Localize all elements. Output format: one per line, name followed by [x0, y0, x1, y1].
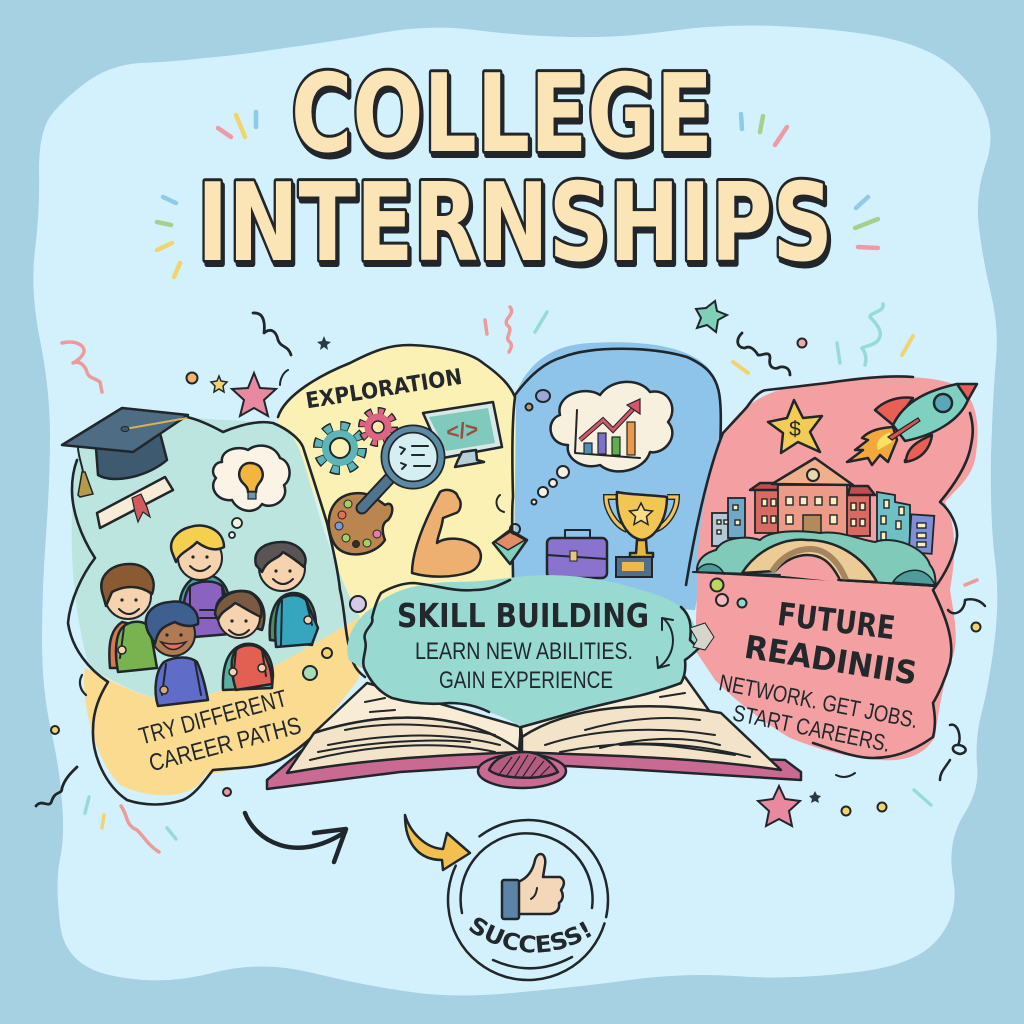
centre fold [519, 727, 521, 752]
page lines [310, 693, 750, 760]
squiggles [36, 304, 985, 852]
body [893, 384, 968, 441]
red panel background [695, 377, 978, 760]
small arc doodle [497, 495, 504, 512]
yellow panel background [278, 344, 516, 625]
icon: rocket [847, 384, 977, 465]
icon: teal gear [318, 426, 362, 470]
stars [232, 373, 276, 416]
icon: computer monitor [423, 402, 502, 467]
student: curly hair [146, 602, 208, 706]
ground line [693, 572, 934, 586]
upper pages left [314, 683, 521, 750]
icon: graduation cap [62, 408, 188, 497]
label: SUCCESS! [469, 918, 592, 953]
right towers [877, 492, 910, 547]
opening under bridge [775, 555, 840, 582]
panel fill: teal [72, 416, 360, 700]
icon: campus buildings [693, 458, 936, 586]
heading: SKILL BUILDING [397, 596, 649, 635]
left towers [712, 513, 732, 546]
lower pages right [522, 706, 781, 770]
student: grey hair [255, 542, 318, 647]
icon: pink gear [362, 411, 394, 443]
coloured bubbles [710, 578, 746, 608]
arch bridge [742, 540, 877, 582]
icon: trophy [606, 492, 677, 577]
icon: thumbs up [502, 854, 564, 919]
panel: try different career paths: CAREER PATHS [146, 712, 304, 777]
icon: palette [329, 493, 392, 554]
wings [755, 490, 779, 533]
title [197, 52, 833, 286]
panel: future readiness [686, 376, 978, 760]
icon: diploma [97, 477, 173, 528]
icon: small cube [493, 524, 527, 564]
blue panel background [510, 342, 722, 610]
student: brown hair left [101, 564, 157, 672]
heading: FUTURE [775, 595, 897, 647]
heading: EXPLORATION [304, 365, 464, 414]
panel: skill building: GAIN EXPERIENCE [439, 667, 613, 694]
panel: blue achievement [510, 342, 722, 610]
icon: flexed arm [412, 490, 481, 577]
cloud outline [363, 580, 699, 727]
icon: computer monitor: </> [445, 416, 479, 445]
students group [101, 526, 318, 706]
flame [847, 427, 897, 465]
upper pages right [521, 677, 728, 737]
fins [875, 398, 932, 462]
title confetti [157, 112, 878, 277]
cover [267, 747, 801, 789]
arrow: black curved [245, 813, 346, 862]
dots [51, 338, 980, 816]
icon: open book [267, 677, 801, 789]
icon: lightbulb thought [213, 446, 290, 538]
cloud background [347, 575, 699, 727]
icon: dollar star [768, 400, 822, 453]
badge rings [428, 800, 628, 1000]
panel: future readiness: READINIIS [742, 628, 920, 693]
title line 1: COLLEGE [291, 52, 713, 177]
main building [778, 485, 847, 535]
icon: dollar star: $ [789, 418, 801, 441]
window [934, 394, 952, 412]
lower pages left [287, 718, 519, 773]
trees and hills [697, 531, 936, 586]
icon: magnifying glass [362, 429, 441, 508]
arrow: yellow curved [405, 815, 470, 870]
nose [957, 384, 977, 400]
panel fill: yellow banner [84, 617, 360, 795]
stone [690, 623, 714, 650]
small bubbles [526, 390, 569, 504]
body text: LEARN NEW ABILITIES. [415, 638, 633, 665]
panel outline [278, 345, 515, 577]
body text: NETWORK. GET JOBS. [717, 669, 920, 733]
panel outline [686, 376, 973, 758]
icon: briefcase [547, 530, 607, 578]
panel: try different career paths [62, 408, 365, 804]
spine [478, 754, 566, 788]
panel outline [68, 417, 365, 804]
icon: chart thought bubble [551, 382, 672, 471]
banner text: TRY DIFFERENT [136, 685, 290, 750]
success badge [446, 818, 610, 982]
doodles and decorations [36, 301, 985, 852]
panel: skill building [347, 575, 714, 727]
panel: exploration [278, 344, 527, 625]
panel: future readiness: START CAREERS. [731, 699, 893, 757]
student: blond [171, 526, 230, 638]
student: center girl [215, 591, 273, 690]
panel outline [515, 349, 721, 453]
cycle arrows [657, 618, 673, 668]
bubble: lavender [350, 596, 366, 612]
title line 2: INTERNSHIPS [197, 161, 833, 286]
